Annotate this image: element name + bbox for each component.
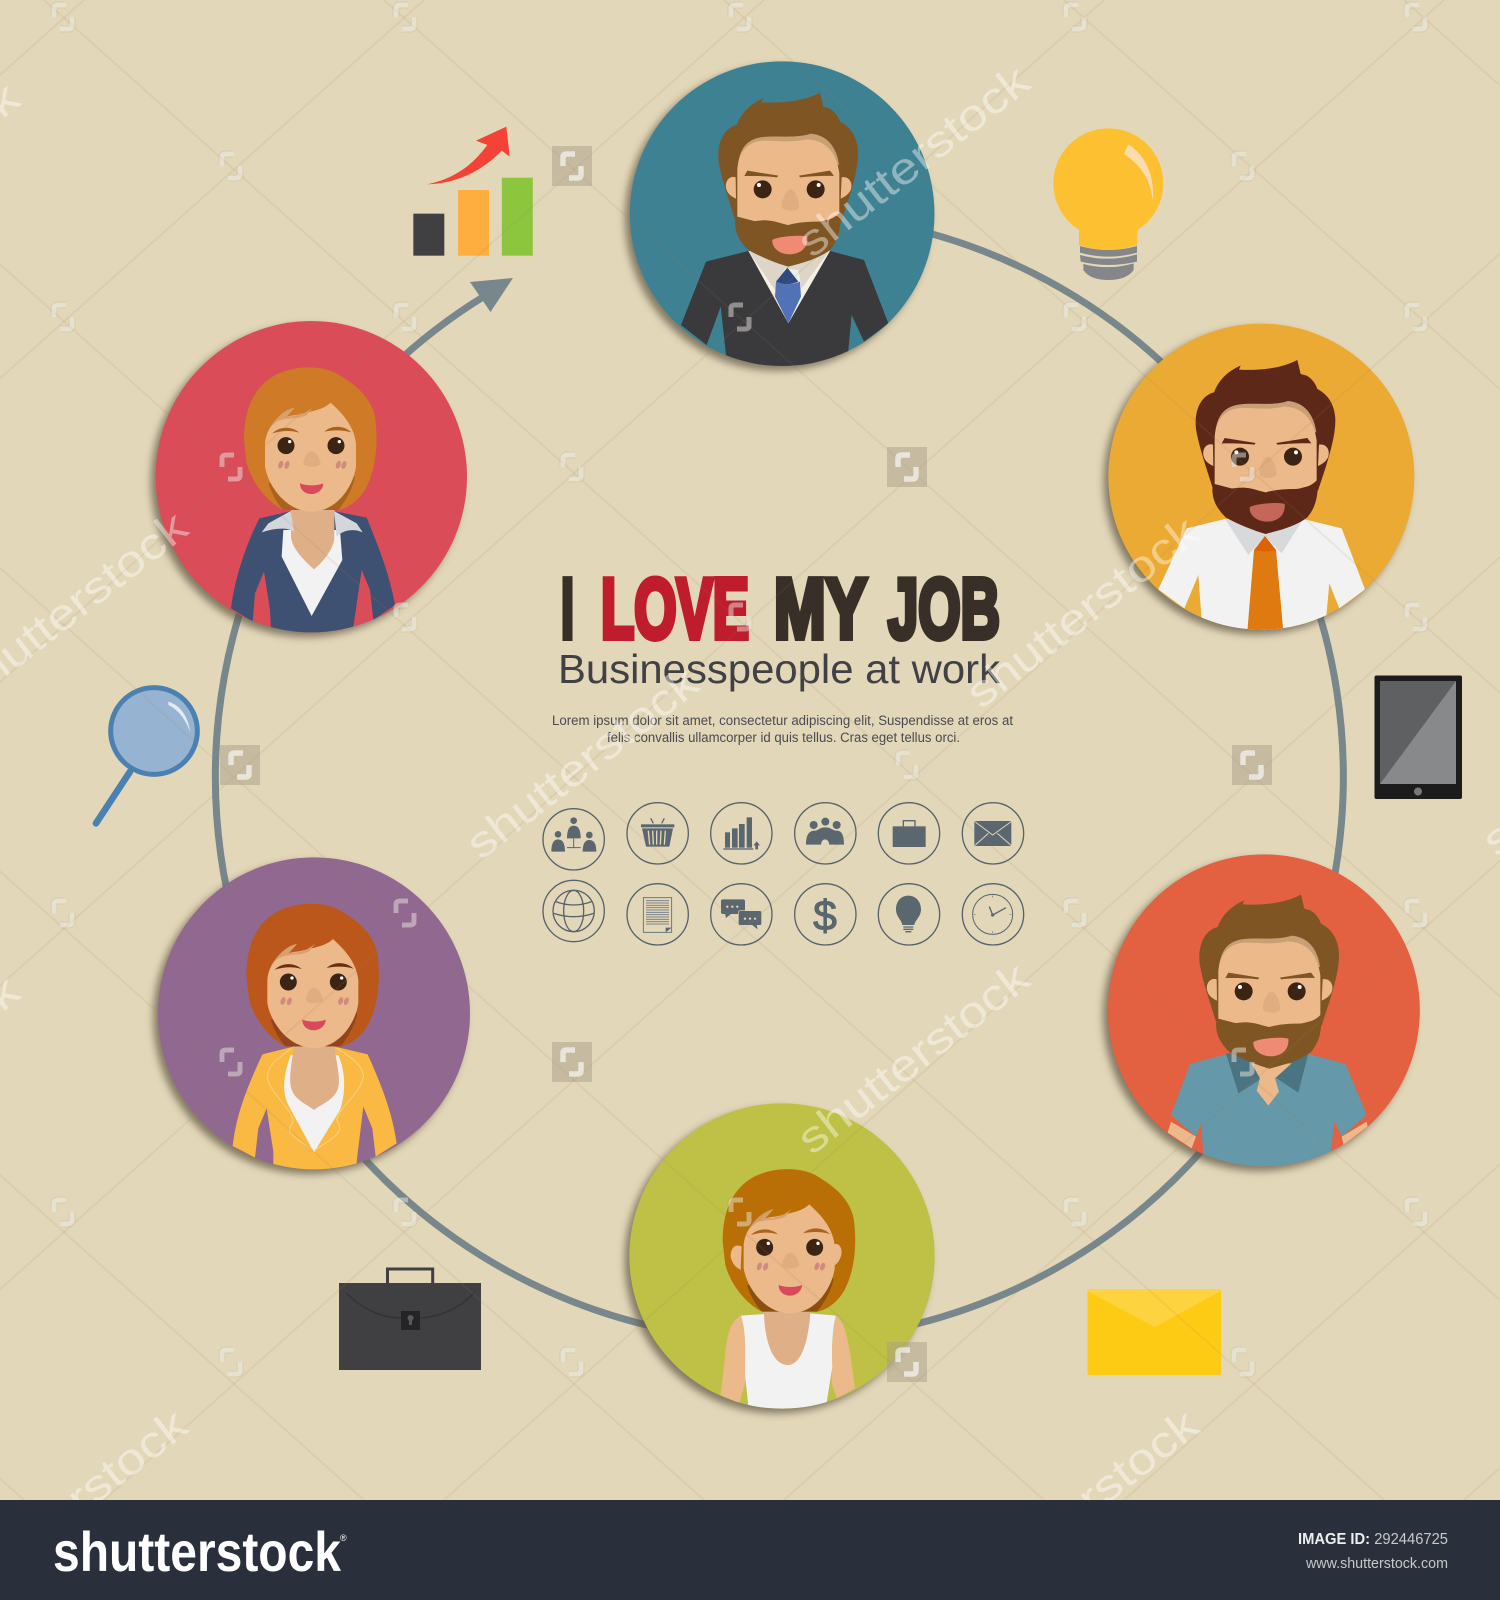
- avatar: man in white shirt and orange tie on amber circle: [1104, 324, 1414, 643]
- subtitle: Businesspeople at work: [558, 646, 1001, 692]
- icon: mail: [962, 803, 1024, 864]
- title: [561, 562, 1000, 657]
- title: MY: [774, 562, 867, 657]
- connecting ring with arrow: [215, 232, 1343, 1341]
- watermark wordmarks: shutterstock: [957, 506, 1209, 718]
- icon: clock: [962, 884, 1024, 945]
- image id: IMAGE ID: 292446725: [1298, 1531, 1448, 1548]
- avatar: woman in white top on olive-green circle: [625, 1103, 935, 1423]
- icon: rising bars: [711, 803, 772, 864]
- avatar: man in teal polo on red-orange circle: [1103, 854, 1420, 1177]
- avatar: man in dark suit on teal circle: [625, 61, 934, 373]
- title: JOB: [888, 562, 1000, 657]
- icon: small briefcase: [878, 803, 940, 864]
- icon: shopping basket: [627, 803, 688, 864]
- website: www.shutterstock.com: [1305, 1555, 1448, 1572]
- icon: yellow light bulb: [1053, 128, 1163, 280]
- watermark wordmarks: shutterstock: [788, 55, 1040, 267]
- icon: growth bar chart with red arrow: [413, 127, 533, 256]
- body text: Lorem ipsum dolor sit amet, consectetur adipiscing elit, Suspendisse at eros at: [552, 713, 1013, 728]
- body text: [552, 713, 1013, 745]
- icon: black briefcase: [339, 1269, 481, 1370]
- icon: dollar sign: [795, 884, 856, 945]
- icon: yellow envelope: [1088, 1289, 1221, 1375]
- body text: felis convallis ullamcorper id quis tellus. Cras eget tellus orci.: [607, 730, 960, 745]
- icon: magnifying glass: [96, 688, 197, 823]
- title: I: [561, 562, 574, 657]
- title: LOVE: [601, 562, 749, 657]
- icon grid: [543, 803, 1024, 945]
- icon: group of people: [795, 803, 856, 864]
- icon: dollar sign: $: [813, 892, 837, 940]
- icon: team hierarchy: [543, 809, 604, 870]
- icon: globe: [543, 880, 604, 942]
- watermark wordmarks: shutterstock: [457, 657, 709, 869]
- avatar: woman in yellow blazer on purple circle: [153, 857, 470, 1182]
- footer bar: [0, 1500, 1500, 1600]
- watermark corner marks: [54, 5, 1425, 1382]
- icon: small light bulb: [878, 884, 940, 945]
- avatar: woman in navy blazer on red circle: [151, 321, 467, 643]
- watermark wordmarks: shutterstock: [788, 952, 1040, 1164]
- footer logo: shutterstock: [53, 1520, 342, 1583]
- icon: tablet: [1374, 676, 1462, 799]
- registered mark: ®: [340, 1533, 347, 1543]
- icon: chat bubbles: [711, 884, 772, 945]
- icon: document: [627, 884, 688, 945]
